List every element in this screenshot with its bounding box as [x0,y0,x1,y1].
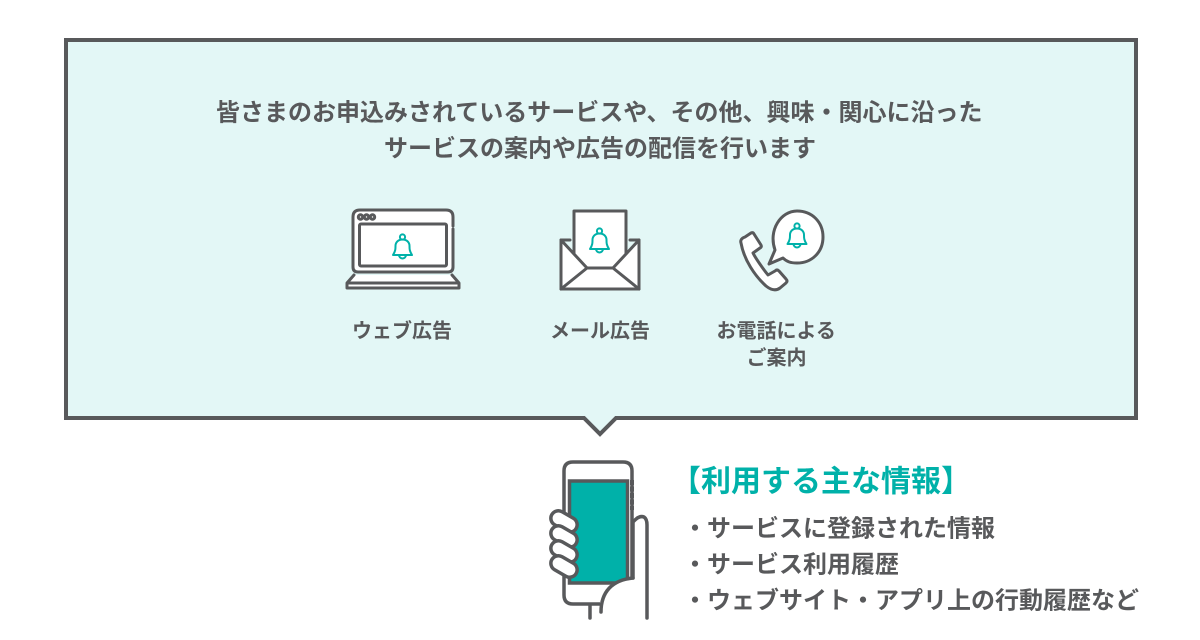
heading text [216,100,983,162]
label: mail ads: メール広告 [550,320,650,342]
icon: envelope with bell [561,211,639,289]
panel: speech bubble [66,40,1136,434]
label: phone guidance [716,320,836,370]
heading: main information: 【利用する主な情報】 [671,466,971,498]
icon: hand holding smartphone [548,462,647,620]
list: information items: ・ウェブサイト・アプリ上の行動履歴など [683,586,1139,614]
heading text: 皆さまのお申込みされているサービスや、その他、興味・関心に沿った [216,100,983,126]
label: phone guidance: ご案内 [746,346,806,370]
heading text: サービスの案内や広告の配信を行います [384,136,816,162]
list: information items [683,516,1139,614]
list: information items: ・サービスに登録された情報 [683,516,995,542]
list: information items: ・サービス利用履歴 [683,552,899,578]
icon: phone with speech bubble [741,211,823,290]
icon: laptop with bell [347,210,459,288]
label: web ads: ウェブ広告 [352,318,452,342]
label: phone guidance: お電話による [716,320,836,342]
